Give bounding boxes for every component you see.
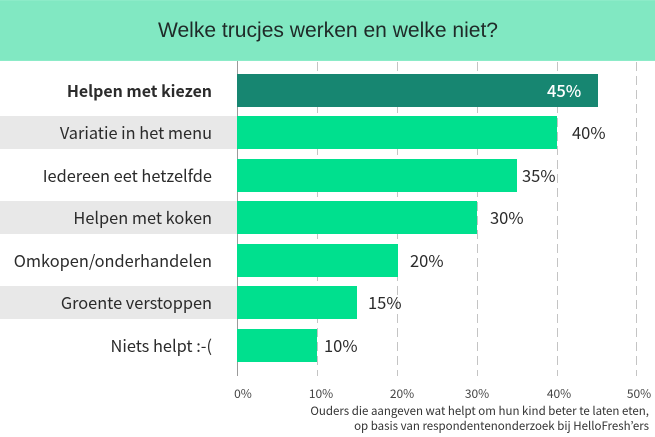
footnote — [310, 403, 649, 434]
row stripe: Helpen met koken — [0, 201, 237, 234]
title banner — [0, 0, 655, 61]
axis tick 0%: 0% — [234, 385, 252, 402]
axis tick 50%: 50% — [627, 385, 651, 402]
value 35%: 35% — [522, 163, 556, 187]
row stripe: Variatie in het menu — [0, 116, 237, 149]
bar: Helpen met kiezen 45% — [237, 74, 598, 107]
title: Welke trucjes werken en welke niet? — [158, 19, 498, 42]
label: Groente verstoppen: Groente verstoppen — [61, 290, 212, 314]
value 30%: 30% — [490, 205, 524, 229]
axis tick 20%: 20% — [390, 385, 414, 402]
label: Omkopen/onderhandelen: Omkopen/onderhandelen — [14, 248, 212, 272]
label: Helpen met kiezen: Helpen met kiezen — [67, 79, 212, 102]
value 15%: 15% — [368, 290, 402, 314]
label: Variatie in het menu: Variatie in het menu — [60, 120, 212, 144]
value 40%: 40% — [572, 120, 606, 144]
label: Iedereen eet hetzelfde: Iedereen eet hetzelfde — [43, 163, 212, 187]
bar: Variatie in het menu 40% — [237, 116, 557, 149]
bar: Niets helpt 10% — [237, 329, 317, 362]
axis tick 10%: 10% — [309, 385, 333, 402]
axis tick 40%: 40% — [547, 385, 571, 402]
value 10%: 10% — [324, 333, 358, 357]
value 45%: 45% — [547, 78, 581, 102]
footnote: Ouders die aangeven wat helpt om hun kind beter te laten eten, — [310, 403, 649, 419]
value 20%: 20% — [410, 248, 444, 272]
axis tick 30%: 30% — [465, 385, 489, 402]
bar: Helpen met koken 30% — [237, 201, 477, 234]
label: Niets helpt: Niets helpt :-( — [111, 333, 212, 357]
bar: Iedereen eet hetzelfde 35% — [237, 159, 517, 192]
bar: Groente verstoppen 15% — [237, 286, 357, 319]
bar: Omkopen/onderhandelen 20% — [237, 244, 398, 277]
footnote: op basis van respondentenonderzoek bij HelloFresh’ers — [354, 418, 649, 434]
label: Helpen met koken: Helpen met koken — [73, 205, 212, 229]
row stripe: Groente verstoppen — [0, 286, 237, 319]
